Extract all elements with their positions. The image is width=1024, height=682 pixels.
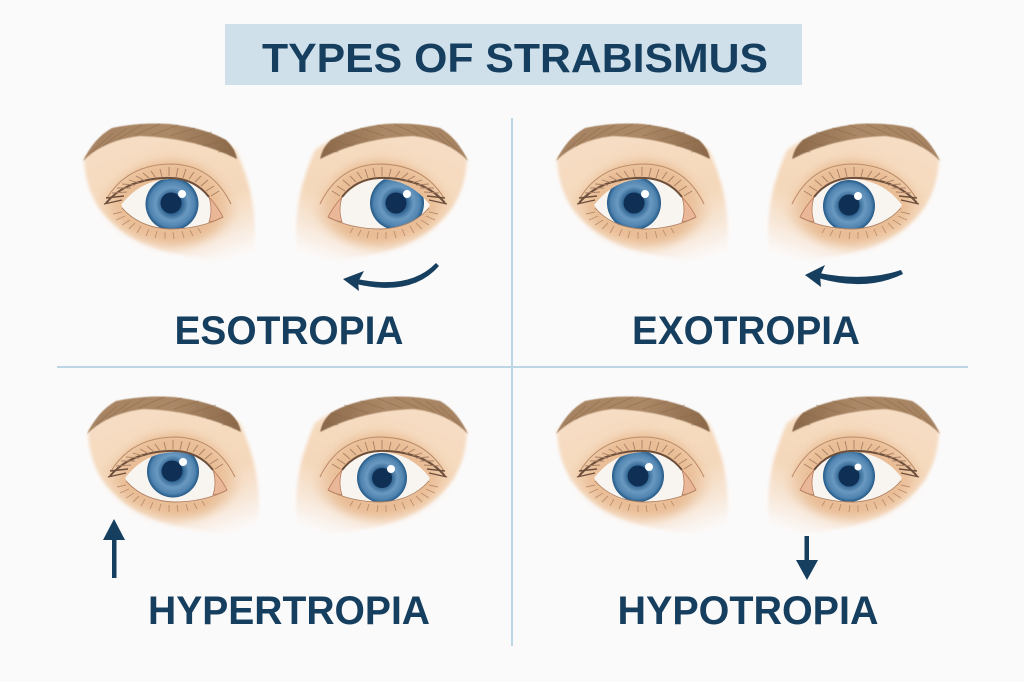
arrow: outward curve — [805, 265, 903, 287]
icon: esotropia right eye — [296, 124, 468, 262]
arrow: up — [103, 519, 125, 578]
panel: exotropia — [556, 124, 940, 353]
icon: hypertropia left eye — [87, 396, 259, 535]
icon: exotropia right eye — [768, 124, 940, 262]
panel: hypertropia — [87, 396, 468, 633]
icon: esotropia left eye — [83, 124, 255, 262]
panel: esotropia — [83, 124, 468, 353]
icon: exotropia left eye — [556, 124, 728, 262]
icon: hypertropia right eye — [296, 396, 468, 535]
label: hypotropia: HYPOTROPIA — [618, 589, 878, 633]
label: hypertropia: HYPERTROPIA — [148, 589, 430, 633]
icon: hypotropia left eye — [556, 396, 728, 535]
title: TYPES OF STRABISMUS — [262, 35, 768, 81]
panel: hypotropia — [556, 396, 940, 633]
icon: hypotropia right eye — [768, 396, 940, 535]
arrow: inward curve — [343, 263, 439, 291]
arrow: down — [796, 536, 818, 580]
title — [225, 24, 802, 85]
label: esotropia: ESOTROPIA — [174, 309, 404, 353]
label: exotropia: EXOTROPIA — [632, 309, 860, 353]
